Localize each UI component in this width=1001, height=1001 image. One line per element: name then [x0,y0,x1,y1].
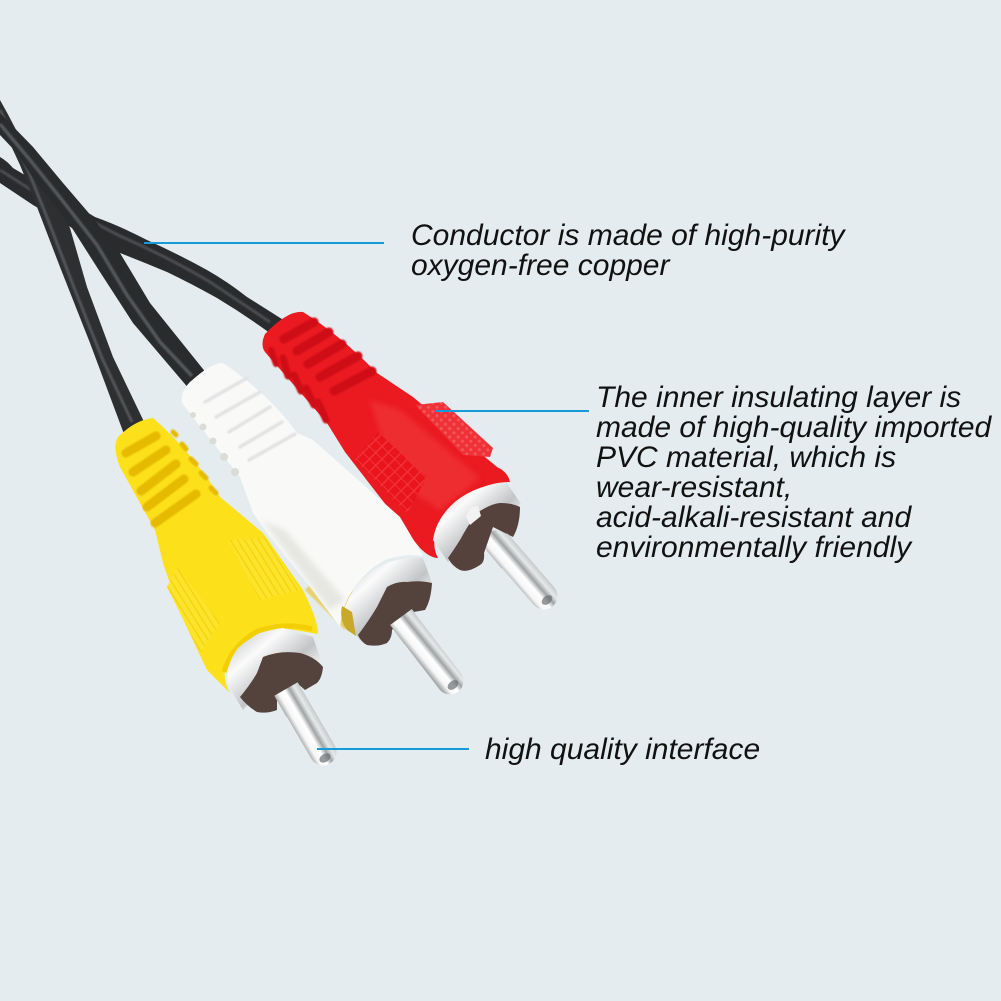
red grip slots [271,322,372,420]
yellow pin front [286,689,298,710]
red front band [436,487,503,535]
callout: insulating layer: PVC material, which is [596,441,896,474]
white metal ring [343,558,432,640]
plug: yellow [115,418,332,764]
red pin front [497,542,512,560]
red pin tip spot [540,593,554,607]
red highlight [370,400,480,510]
plug: red [262,312,554,607]
red texture patch upper [415,402,493,457]
callout: insulating layer [596,381,992,564]
callout: insulating layer: wear-resistant, [596,471,792,504]
callout: insulating layer: acid-alkali-resistant and [596,501,911,534]
white pin front [401,617,415,636]
callout: insulating layer: made of high-quality imported [596,411,991,444]
red body [262,312,510,558]
callout: insulating layer: The inner insulating layer is [596,381,961,414]
callout: insulating layer: environmentally friendly [596,531,911,564]
cable: white plug lead [0,113,207,390]
yellow pin [288,692,323,752]
white grip lines [205,378,295,460]
white body [182,363,423,627]
yellow reflection on white plug [305,565,360,630]
callout: interface: high quality interface [485,733,760,766]
white body shading [262,520,345,610]
yellow texture patch right [228,538,300,600]
red connector interior [448,503,520,571]
white pin tip spot [446,678,460,692]
cable: yellow plug lead [0,100,147,434]
callout: conductor: oxygen-free copper [411,249,670,282]
white grip bumps [190,412,239,476]
yellow pin tip spot [318,752,332,764]
leader line: conductor [144,242,384,244]
yellow connector interior [240,652,323,713]
yellow body [115,418,318,693]
red metal shine [466,506,481,525]
cable: red plug lead [0,157,285,335]
red metal ring [433,483,521,562]
red texture patch lower [355,432,427,513]
white ring yellow reflection [341,606,356,636]
callout: conductor [411,219,846,282]
red pin [498,543,544,596]
yellow metal ring [227,628,322,710]
callout: conductor: Conductor is made of high-purity [411,219,845,252]
leader line: insulating layer [435,410,589,412]
white connector interior [358,581,432,646]
yellow front band [224,626,312,672]
yellow grip slots [126,432,216,523]
white pin [403,620,450,681]
leader line: interface [317,748,469,750]
plug: white [182,363,460,692]
yellow texture patch left [167,567,220,653]
